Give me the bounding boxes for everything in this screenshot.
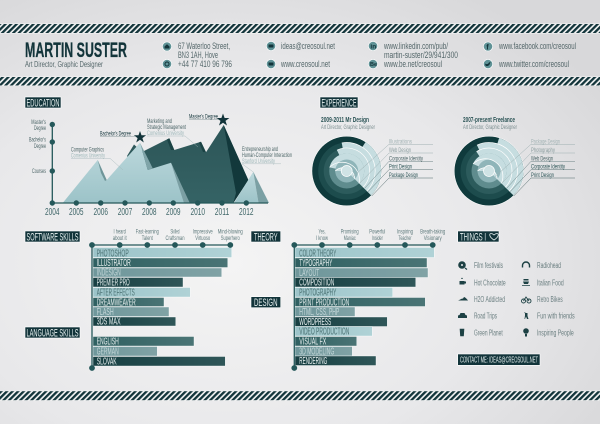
title: name: MARTIN SUSTER <box>25 39 127 62</box>
donut chart 1 labels: Illustrations <box>389 138 413 146</box>
panel: software and language skills <box>25 228 243 371</box>
mountain chart <box>63 125 269 203</box>
heading: things: THINGS I <box>460 231 486 243</box>
donut chart 1 labels: Package Design <box>389 172 418 179</box>
degree axis labels: Bachelor's <box>29 136 46 144</box>
job role 1: Art Director, Graphic Designer <box>321 124 376 131</box>
small light mountain <box>234 172 269 203</box>
text: radiohead: Radiohead <box>537 261 561 270</box>
theory bar labels: HTML, CSS, PHP <box>299 307 339 318</box>
icon: water <box>458 297 468 300</box>
phone number: +44 77 410 96 796 <box>178 59 232 69</box>
donut chart 2 <box>454 136 524 206</box>
job title 2: 2007-present Freelance <box>463 115 515 124</box>
icon: friends <box>524 312 528 319</box>
skill bars <box>93 248 232 366</box>
annotation: computer graphics <box>71 146 123 170</box>
year labels <box>45 207 254 218</box>
annotation: bachelor's degree: Bachelor's Degree <box>100 130 131 138</box>
skill bar labels: FLASH <box>97 307 114 318</box>
degree axis labels <box>29 119 46 175</box>
header divider stripe band <box>0 76 600 86</box>
icon: star master <box>217 114 229 126</box>
theory bar labels: VISUAL FX <box>299 336 326 347</box>
heading: education <box>25 97 61 109</box>
theory scale labels: Maniac <box>344 235 356 242</box>
donut chart 1 labels <box>353 138 433 196</box>
panel: theory and design: VIDEO PRODUCTION <box>299 327 349 338</box>
linkedin url line 2: martin-suster/29/941/300 <box>384 50 458 60</box>
icon: linkedin: in <box>370 43 376 50</box>
light mountain range <box>63 143 190 203</box>
theory bar labels: WORDPRESS <box>299 317 331 328</box>
icon: headphones <box>522 262 530 268</box>
skill scale labels: Superhero <box>221 235 240 242</box>
skill scale labels: Craftsman <box>166 235 185 242</box>
dark mountain range <box>127 125 248 203</box>
icon: email <box>266 41 276 51</box>
theory bar labels: LAYOUT <box>299 268 319 279</box>
heading: design: DESIGN <box>254 297 278 309</box>
annotation: computer graphics: Computer Graphics <box>71 146 104 154</box>
text: hot chocolate: Hot Chocolate <box>474 278 506 287</box>
heading: education: EDUCATION <box>26 97 60 109</box>
annotation: marketing <box>147 118 198 147</box>
icon: star bachelor <box>134 131 146 142</box>
text: retro bikes: Retro Bikes <box>537 295 563 304</box>
year labels: 2007 <box>118 207 133 218</box>
annotation: computer graphics: Comenius University <box>71 152 105 160</box>
icon: food <box>522 279 530 286</box>
top stripe band <box>0 24 600 34</box>
donut chart 1 <box>312 136 382 206</box>
skill bar labels: ENGLISH <box>97 337 119 348</box>
icon: behance <box>368 59 378 69</box>
theory scale labels: Promising <box>341 228 359 236</box>
icon: light bulb <box>523 328 529 336</box>
theory bar labels: PHOTOGRAPHY <box>299 287 336 298</box>
timeline axis <box>50 122 268 206</box>
donut chart 1 labels: Web Design <box>389 147 411 154</box>
skill scale labels: Mind-blowing <box>218 228 243 236</box>
year labels: 2005 <box>69 207 84 218</box>
skill bar labels: SLOVAK <box>97 356 117 367</box>
panel: software and language skills: DREAMWEAVER <box>97 297 136 308</box>
website: www.creosoul.net <box>280 59 330 69</box>
year labels: 2011 <box>215 207 230 218</box>
panel: experience <box>312 97 575 206</box>
year labels: 2004 <box>45 207 60 218</box>
icon: twitter <box>483 59 493 69</box>
text: green planet: Green Planet <box>474 329 503 338</box>
donut chart 2 labels: Web Design <box>531 155 553 162</box>
donut chart 1 labels: Corporate Identity <box>389 155 423 162</box>
heading: experience <box>320 97 358 109</box>
skill scale labels: Virtuoso <box>195 235 210 242</box>
theory bar labels: COMPOSITION <box>299 278 334 289</box>
skill scale labels: Skilled <box>170 228 180 236</box>
theory scale labels: Insider <box>372 235 383 242</box>
degree axis labels: Courses <box>32 168 46 175</box>
annotation: bachelor's degree <box>100 130 135 138</box>
donut chart 2 labels: Corporate Identity <box>531 164 565 171</box>
theory bar labels: PRINT PRODUCTION <box>299 297 349 308</box>
degree axis labels: Degree <box>34 125 46 132</box>
skill bar labels <box>97 248 136 367</box>
panel: software and language skills: AFTER EFFECTS <box>97 288 135 299</box>
icon: phone <box>162 59 172 69</box>
text: inspiring people: Inspiring People <box>537 329 574 338</box>
heading: language skills <box>25 327 80 339</box>
icon: hot chocolate <box>460 278 466 284</box>
skill scale labels: Talent <box>142 235 153 242</box>
theory bar labels: TYPOGRAPHY <box>299 258 332 269</box>
theory scale labels: Yes, <box>318 228 326 236</box>
contact block <box>162 41 576 69</box>
theory scale labels: Teacher <box>398 235 412 242</box>
theory axis <box>291 242 436 371</box>
icon: behance: Be <box>370 62 377 68</box>
annotation: entrepreneurship <box>242 146 292 172</box>
email: ideas@creosoul.net <box>281 41 335 51</box>
icon: facebook: f <box>486 42 489 51</box>
icon: linkedin <box>368 41 378 51</box>
theory bar labels: RENDERING <box>299 356 327 367</box>
theory bar labels: 3D MODELING <box>299 346 334 357</box>
skill bar labels: INDESIGN <box>97 268 121 279</box>
skill scale labels <box>113 228 243 242</box>
panel: things i love <box>458 231 575 365</box>
panel: education <box>25 97 292 218</box>
heading: theory <box>251 231 281 243</box>
theory scale labels <box>316 228 445 242</box>
theory scale labels: Visionary <box>424 235 442 242</box>
icon: home <box>162 42 172 51</box>
heading: software skills: SOFTWARE SKILLS <box>26 231 78 243</box>
heading: experience: EXPERIENCE <box>322 97 356 109</box>
year labels: 2008 <box>142 207 157 218</box>
year labels: 2009 <box>166 207 181 218</box>
skill scale labels: Impressive <box>193 228 213 236</box>
job title 1: 2009-2011 Mr Design <box>321 115 369 124</box>
icon: web <box>266 59 276 69</box>
degree axis labels: Master's <box>31 119 46 126</box>
theory scale labels: Inspiring <box>397 228 413 236</box>
skill scale labels: Fast-learning <box>136 228 159 236</box>
annotation: marketing: Marketing and <box>147 118 172 125</box>
skill bar labels: GERMAN <box>97 346 119 357</box>
behance url: www.be.net/creosoul <box>383 59 442 69</box>
skill bar labels: 3DS MAX <box>97 317 121 328</box>
job role 2: Art Director, Graphic Designer <box>463 124 518 131</box>
theory bar labels <box>299 248 349 367</box>
icon: car <box>458 313 467 318</box>
theory scale labels: Breath-taking <box>420 228 445 236</box>
annotation: marketing: Strategic Management <box>147 124 186 131</box>
donut chart 2 labels <box>495 138 575 196</box>
skill scale labels: I heard <box>114 228 126 236</box>
skill axis <box>89 242 233 371</box>
year labels: 2010 <box>190 207 205 218</box>
icon: facebook <box>483 42 493 51</box>
text: fun with friends: Fun with friends <box>537 312 575 321</box>
linkedin url: www.linkedin.com/pub/ <box>383 41 448 51</box>
text: road trips: Road Trips <box>474 312 497 321</box>
annotation: master's degree <box>189 113 219 120</box>
twitter url: www.twitter.com/creosoul <box>498 59 569 69</box>
text: h2o addicted: H2O Addicted <box>474 295 505 304</box>
year labels: 2012 <box>239 207 254 218</box>
annotation: entrepreneurship: Stanford University <box>242 158 275 165</box>
skill bar labels: PREMIER PRO <box>97 278 130 289</box>
bottom stripe band <box>0 391 600 401</box>
address line 2: BN3 1AH, Hove <box>178 50 218 60</box>
theory scale labels: Powerful <box>369 228 386 236</box>
skill scale labels: about it <box>113 235 127 242</box>
skill bar labels: PHOTOSHOP <box>97 248 129 259</box>
annotation: marketing: Comenius University <box>147 130 184 137</box>
donut chart 2 labels: Package Design <box>531 138 560 146</box>
theory scale labels: I know <box>316 235 328 242</box>
heading: theory: THEORY <box>254 231 278 243</box>
subtitle: role: Art Director, Graphic Designer <box>25 59 103 69</box>
address line 1: 67 Waterloo Street, <box>178 41 230 51</box>
heading: language skills: LANGUAGE SKILLS <box>26 327 78 339</box>
donut chart 2 labels: Photography <box>531 147 555 154</box>
theory bars <box>295 248 434 366</box>
annotation: master's degree: Master's Degree <box>189 113 218 120</box>
heading: software skills <box>25 231 80 243</box>
annotation: entrepreneurship: Human-Computer Interaction <box>242 152 292 159</box>
panel: theory and design <box>251 228 445 371</box>
text: italian food: Italian Food <box>537 278 564 287</box>
year labels: 2006 <box>93 207 108 218</box>
donut chart 2 labels: Print Design <box>531 172 554 179</box>
icon: recycle bin <box>460 329 464 336</box>
text: film festivals: Film festivals <box>474 261 503 270</box>
donut chart 1 labels: Print Design <box>389 164 412 171</box>
heading: design <box>251 297 281 309</box>
degree axis labels: Degree <box>34 143 46 150</box>
icon: film <box>458 261 467 270</box>
skill bar labels: ILLUSTRATOR <box>97 258 131 269</box>
icon: bike <box>522 297 531 303</box>
theory bar labels: COLOR THEORY <box>299 248 336 259</box>
annotation: entrepreneurship: Entrepreneurship and <box>242 146 278 153</box>
